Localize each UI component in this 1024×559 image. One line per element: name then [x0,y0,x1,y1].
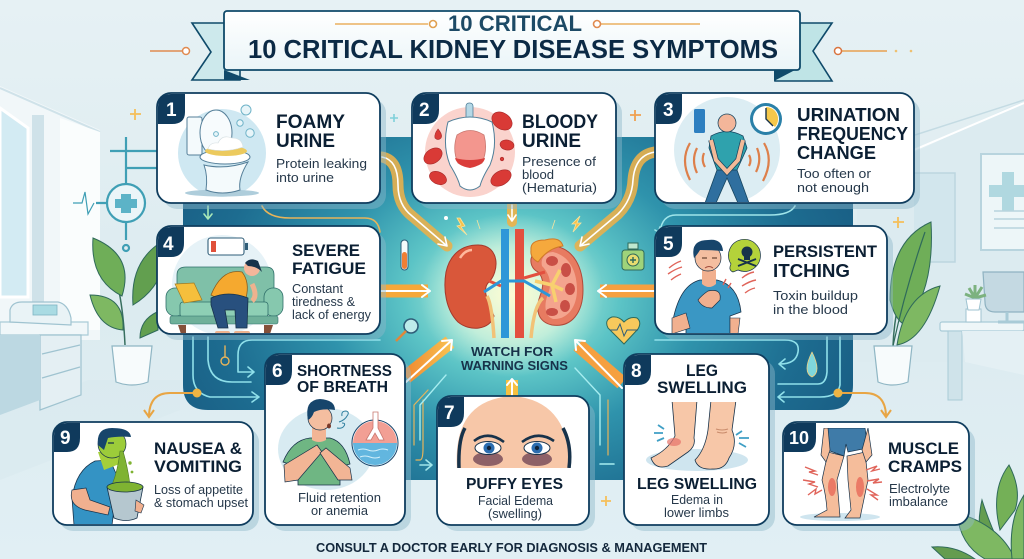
left medical symbol [73,137,157,251]
text: bloody urine: BLOODY [522,112,598,133]
text: foamy urine: Protein leaking [276,157,367,171]
icon: cramping legs [800,428,882,521]
icon: urgent person and clock [674,97,782,203]
plant bottom right [932,465,1024,559]
text: nausea and vomiting: Loss of appetite [154,483,243,497]
text: muscle cramps: imbalance [889,495,948,509]
watch for warning signs: WATCH FOR [471,345,553,359]
title line 2: 10 CRITICAL KIDNEY DISEASE SYMPTOMS [248,36,778,64]
text: leg swelling: LEG SWELLING [637,476,757,493]
card 6: shortness of breath: 6 [272,361,283,382]
text: muscle cramps: CRAMPS [888,457,962,476]
watch for warning signs [461,345,568,373]
text: nausea and vomiting: VOMITING [154,457,242,476]
text: bloody urine: (Hematuria) [522,181,597,195]
arrow: from card 2 [508,205,516,222]
text: leg swelling: SWELLING [657,379,747,397]
text: muscle cramps: MUSCLE [888,439,959,458]
text: urination frequency change: FREQUENCY [797,124,908,144]
connector arrow to card 9 [144,388,202,417]
text: severe fatigue: FATIGUE [292,259,366,278]
card 3: urination frequency change: 3 [663,100,674,121]
icon: person on sofa with low battery [166,235,283,335]
text: bloody urine: Presence of [522,155,597,169]
icon: vomiting person with bucket [71,428,144,525]
wall poster [981,154,1024,250]
card 2: bloody urine [412,93,622,209]
plant right [874,222,940,385]
text: urination frequency change: not enough [797,181,869,195]
connector arrow to card 10 [834,388,891,417]
card 8: leg swelling [624,354,775,531]
card 5: persistent itching: 5 [663,234,674,255]
text: persistent itching: ITCHING [773,261,850,281]
icon: swollen feet [646,400,749,471]
kidneys illustration [445,229,583,338]
text: nausea and vomiting: NAUSEA & [154,439,242,458]
text: foamy urine: FOAMY [276,112,345,133]
text: foamy urine: into urine [276,171,334,185]
title banner [150,11,912,81]
small floating icons [130,109,904,506]
center glow [420,213,604,377]
text: puffy eyes: (swelling) [488,507,542,521]
arrow: from card 6 [406,340,452,382]
card 9: nausea and vomiting: 9 [60,428,71,449]
icon: toilet [178,105,266,197]
text: severe fatigue: tiredness & [292,295,356,309]
text: leg swelling: LEG [686,362,718,380]
text: urination frequency change: CHANGE [797,143,876,163]
card 4: severe fatigue [157,226,386,340]
card 1: foamy urine: 1 [166,100,177,121]
right kidney [531,246,583,325]
text: puffy eyes: PUFFY EYES [466,476,563,493]
icon: urinal with blood cells [421,103,516,197]
card 7: puffy eyes: 7 [444,403,455,424]
arrow: from card 4 [380,285,430,297]
text: persistent itching: PERSISTENT [773,242,878,261]
text: severe fatigue: Constant [292,282,344,296]
card 4: severe fatigue: 4 [163,234,174,255]
card 3: urination frequency change [655,93,920,209]
adrenal [531,239,563,262]
right desk and monitor [940,272,1024,400]
text: shortness of breath: OF BREATH [297,379,388,396]
card 1: foamy urine [157,93,386,209]
text: urination frequency change: URINATION [797,105,900,125]
card 10: muscle cramps: 10 [789,428,809,448]
arrow: from card 7 [507,379,517,396]
text: persistent itching: Toxin buildup [773,289,858,303]
card 9: nausea and vomiting [53,422,259,531]
arrow: from urine card 1 [382,157,447,246]
text: leg swelling: lower limbs [664,506,729,520]
footer note: CONSULT A DOCTOR EARLY FOR DIAGNOSIS & MANAGEMENT [316,540,707,555]
arrow: from urine card 3 [580,152,655,246]
card 8: leg swelling: 8 [631,361,642,382]
card 10: muscle cramps [783,422,975,531]
text: urination frequency change: Too often or [797,167,871,181]
watch for warning signs: WARNING SIGNS [461,359,568,373]
text: severe fatigue: lack of energy [292,308,372,322]
text: shortness of breath: SHORTNESS [297,363,392,380]
left desk [0,302,88,415]
icon: breathless person with lungs [278,399,398,490]
text: bloody urine: blood [522,168,554,182]
icon: face with puffy eyes [457,396,570,470]
arrow: from card 8 [575,340,622,388]
arrow: from card 5 [598,285,655,297]
card 5: persistent itching [655,226,893,340]
text: puffy eyes: Facial Edema [478,494,553,508]
left kidney [445,245,496,328]
text: leg swelling: Edema in [671,493,723,507]
icon: itching person with toxin symbol [668,239,760,334]
text: bloody urine: URINE [522,131,581,152]
text: nausea and vomiting: & stomach upset [154,496,249,510]
text: foamy urine: URINE [276,131,335,152]
plant left [90,238,165,385]
text: severe fatigue: SEVERE [292,241,360,260]
big arrows to kidneys [380,152,655,396]
text: shortness of breath: Fluid retention [298,491,381,505]
card 7: puffy eyes [437,396,595,531]
card 6: shortness of breath [265,354,411,531]
text: muscle cramps: Electrolyte [889,482,950,496]
title line 1: 10 CRITICAL [448,11,582,36]
text: shortness of breath: or anemia [311,504,368,518]
flow lines [193,206,840,470]
teal central panel [183,137,853,480]
card 2: bloody urine: 2 [419,100,430,121]
text: persistent itching: in the blood [773,303,848,317]
